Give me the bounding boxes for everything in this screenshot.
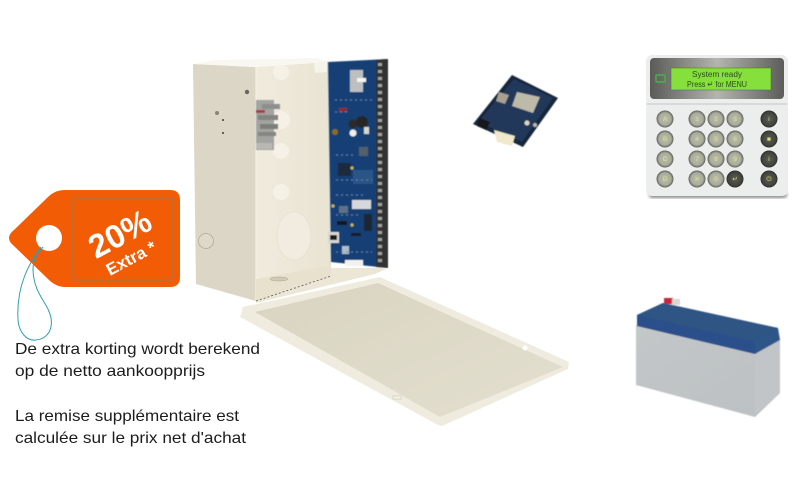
enclosure bottom wall	[256, 265, 331, 301]
keypad body	[646, 55, 788, 196]
tag subline: Extra *	[103, 237, 160, 279]
keypad button labels: 9	[733, 156, 737, 163]
battery case	[636, 325, 780, 417]
status icon	[656, 75, 665, 82]
LCD text	[687, 69, 747, 89]
battery lid	[637, 303, 780, 354]
keypad button labels: 3	[733, 116, 737, 123]
enclosure top edge	[193, 58, 328, 67]
keypad button labels: 1	[695, 116, 699, 123]
battery terminals	[664, 298, 673, 304]
keypad button labels: B	[663, 136, 667, 143]
note: Dutch: De extra korting wordt berekend	[15, 341, 260, 358]
keypad button labels: 5	[714, 136, 718, 143]
keypad button labels: ■	[767, 136, 771, 143]
LCD text: System ready	[692, 69, 743, 79]
keypad button labels: ⏻	[766, 176, 772, 183]
note: Dutch: op de netto aankoopprijs	[15, 363, 205, 380]
product: communication module	[473, 75, 558, 147]
keypad display bezel	[650, 58, 784, 99]
keypad button labels: 4	[695, 136, 699, 143]
product: open control panel enclosure	[193, 58, 388, 303]
product: battery	[636, 298, 780, 417]
discount tag	[9, 190, 180, 340]
keypad buttons	[656, 110, 778, 188]
keypad button labels: 7	[695, 156, 699, 163]
note: French: La remise supplémentaire est	[15, 408, 240, 425]
circuit board	[328, 59, 388, 268]
tag hole	[36, 225, 62, 251]
transformer wiring block	[256, 100, 280, 150]
keypad button labels: i	[768, 116, 770, 123]
white plastic standoff	[314, 61, 327, 73]
product: enclosure door	[240, 276, 569, 426]
enclosure interior wall	[256, 62, 331, 279]
keypad button labels: 8	[714, 156, 718, 163]
keypad button labels: 0	[714, 176, 718, 183]
keypad button labels: 2	[714, 116, 718, 123]
keypad button labels: 6	[733, 136, 737, 143]
keypad button labels: ↵	[732, 176, 738, 183]
keypad button labels: D	[663, 176, 668, 183]
LCD screen	[671, 68, 771, 90]
keypad button labels	[663, 116, 772, 183]
product: keypad	[646, 55, 788, 198]
keypad button labels: i	[768, 156, 770, 163]
tag string	[18, 247, 51, 340]
keypad button labels: A	[663, 116, 668, 123]
enclosure left side panel	[193, 64, 256, 301]
keypad button labels: C	[663, 156, 668, 163]
tag body	[9, 190, 180, 287]
note: Dutch	[15, 341, 260, 380]
tag inner border	[73, 198, 173, 280]
keypad button labels: ✕	[694, 176, 700, 183]
note: French	[15, 408, 247, 447]
note: French: calculée sur le prix net d'achat	[15, 430, 247, 447]
enclosure bottom rim	[256, 268, 388, 303]
LCD text: Press ↵ for MENU	[687, 79, 747, 89]
keypad shadow	[649, 192, 787, 198]
tag headline: 20%	[82, 202, 158, 265]
